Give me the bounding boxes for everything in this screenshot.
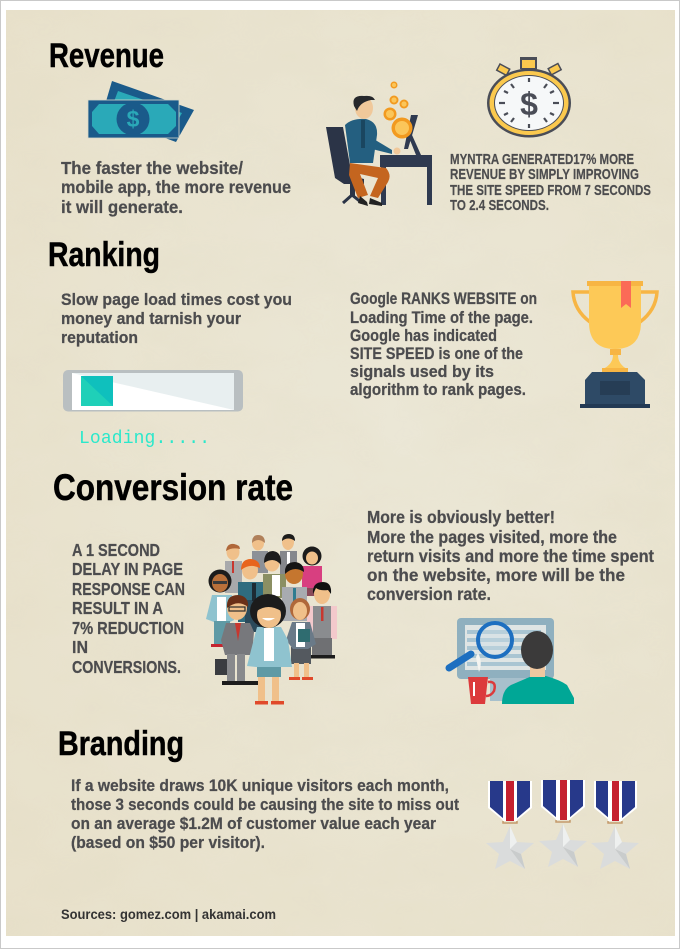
woman in front [247,594,292,704]
medal 3 [591,781,639,869]
text: Google ranking explanation: algorithm to rank pages. [350,380,526,399]
desk [380,155,432,167]
text: conversion statistic: RESULT IN A [72,598,163,618]
icon: crowd of people [206,534,337,704]
text: conversion statistic [72,540,185,677]
text: more is better: More is obviously better! [367,507,555,527]
back row man right [280,534,297,577]
chair [326,127,364,184]
heading: Branding: Branding [58,725,184,763]
text: Google ranking explanation: Loading Time of the page. [350,308,533,327]
text: Myntra statistic: TO 2.4 SECONDS. [450,197,549,214]
icon: banknotes [88,81,194,142]
text: conversion statistic: RESPONSE CAN [72,579,185,599]
text: conversion statistic: A 1 SECOND [72,540,160,560]
text: ranking intro: money and tarnish your [61,309,241,328]
heading: Revenue: Revenue [49,37,164,75]
text: branding explanation: (based on $50 per visitor). [71,833,265,852]
man with glasses [215,595,258,685]
text: Google ranking explanation: Google has indicated [350,326,497,345]
girl in olive [263,551,286,598]
text: Google ranking explanation [350,289,537,399]
icon: loading bar [63,370,243,412]
icon: three medals [486,780,639,869]
icon: trophy [573,281,657,408]
text: Google ranking explanation: signals used by its [350,362,494,381]
text: branding explanation: those 3 seconds could be causing the site to miss out [71,795,459,814]
icon: stopwatch [487,57,571,138]
woman with book [286,598,316,680]
monitor [404,115,418,149]
dark-skinned man [282,562,307,621]
back row man left [225,544,242,593]
man with orange hair [238,559,270,632]
head [355,97,373,119]
torso [345,119,377,163]
text: conversion statistic: IN [72,637,88,657]
text: more is better: return visits and more the time spent [367,546,654,566]
text: conversion statistic: DELAY IN PAGE [72,559,183,579]
coins [390,82,398,88]
medal 2 [539,780,587,867]
text: revenue intro: it will generate. [61,197,183,217]
text: Google ranking explanation: SITE SPEED is one of the [350,344,523,363]
text: conversion statistic: CONVERSIONS. [72,657,181,677]
text: loading label: Loading..... [79,429,210,449]
woman on the left [206,570,234,647]
text: more is better [367,507,654,604]
trousers and shoes [349,163,390,198]
text: conversion statistic: 7% REDUCTION [72,618,184,638]
text: sources: Sources: gomez.com | akamai.com [61,906,276,922]
text: branding explanation: If a website draws 10K unique visitors each month, [71,776,449,795]
text: revenue intro: mobile app, the more revenue [61,177,291,197]
icon: man at desk with coins [326,82,432,206]
text: more is better: conversion rate. [367,584,491,604]
heading: Ranking: Ranking [48,236,160,274]
text: more is better: More the pages visited, more the [367,527,617,547]
text: branding explanation: on an average $1.2M of customer value each year [71,814,436,833]
text: Myntra statistic [450,151,651,214]
text: Google ranking explanation: Google RANKS WEBSITE on [350,289,537,308]
heading: Conversion rate: Conversion rate [53,467,293,508]
man in vest [307,582,337,658]
text: ranking intro: reputation [61,328,138,347]
icon: person at monitor with magnifier [449,618,574,704]
text: ranking intro [61,290,292,347]
icon: stopwatch: $ [520,86,538,122]
woman in pink [302,546,322,596]
text: revenue intro [61,158,291,217]
medal 1 [486,781,534,869]
text: more is better: on the website, more will be the [367,565,625,585]
text: ranking intro: Slow page load times cost you [61,290,292,309]
icon: banknotes: $ [127,106,140,132]
text: revenue intro: The faster the website/ [61,158,243,178]
back row woman [252,535,268,573]
text: branding explanation [71,776,459,852]
